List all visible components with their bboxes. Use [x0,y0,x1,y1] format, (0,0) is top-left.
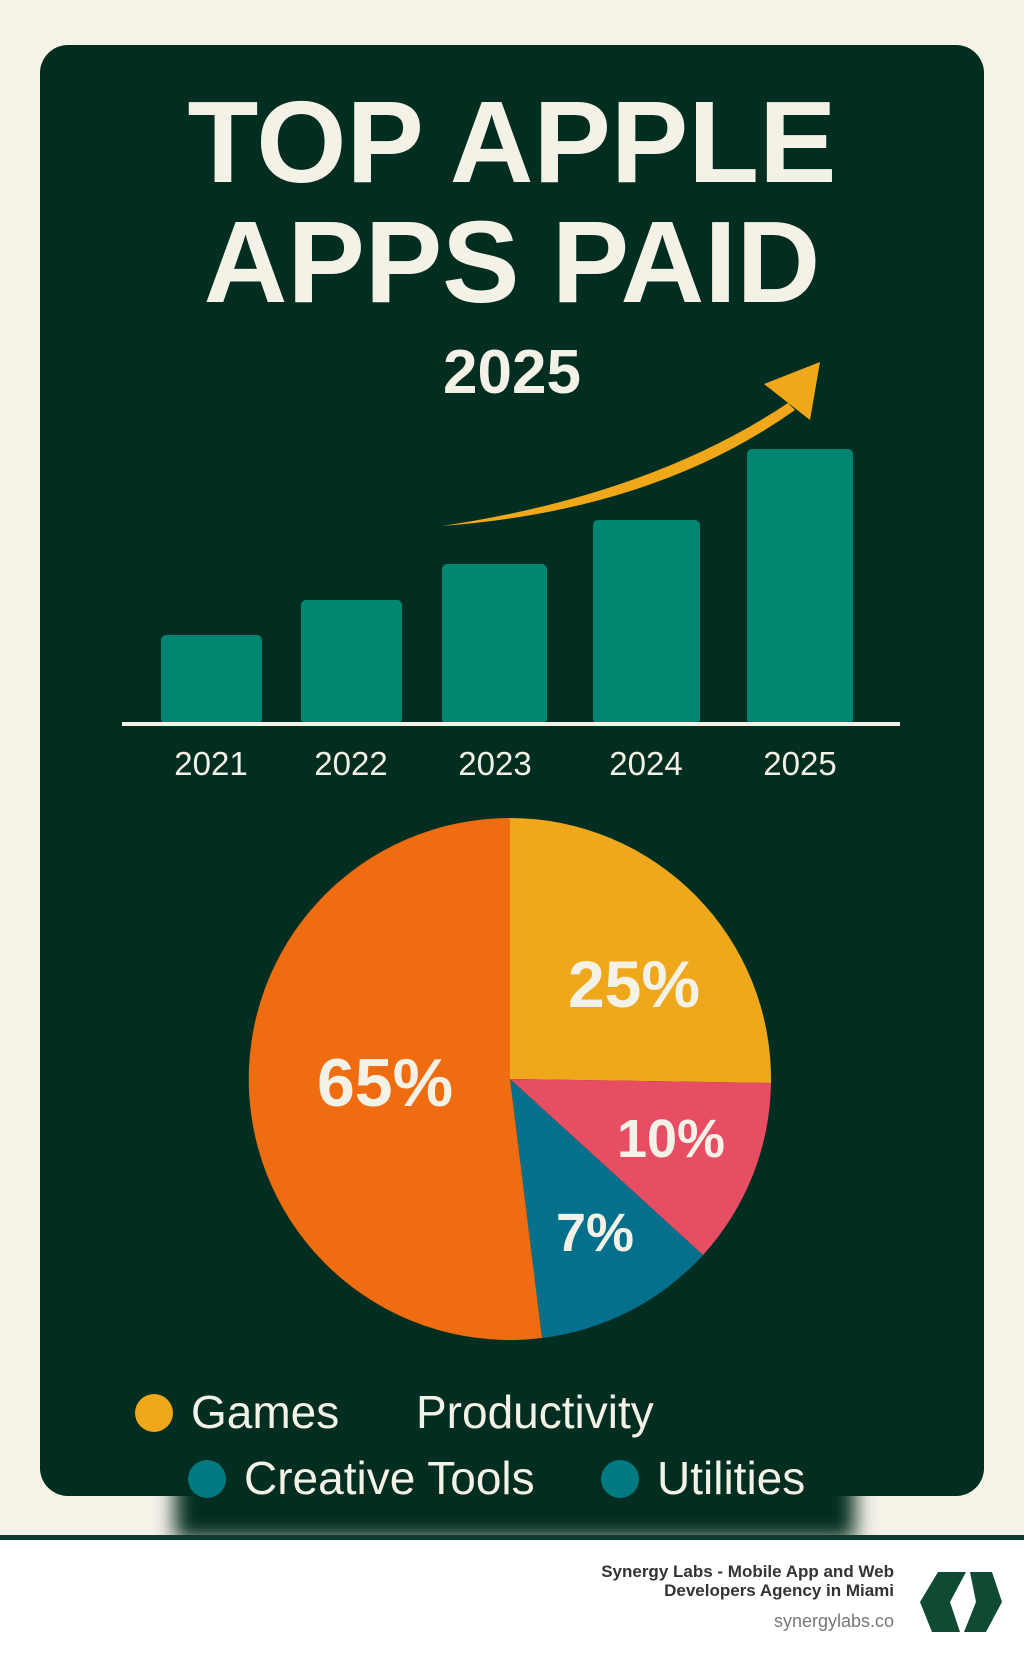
legend [135,1386,805,1504]
arrow: growth [442,362,820,526]
title [188,77,836,327]
logo [920,1572,1002,1632]
bar chart: 2021 [174,745,248,782]
pie chart: 65% [317,1045,453,1121]
title: TOP APPLE [188,77,836,207]
pie chart: 7% [556,1203,634,1263]
legend item: games: Games [191,1386,339,1438]
pie chart [248,818,772,1340]
legend item: creative tools: Creative Tools [244,1452,535,1504]
subtitle year: 2025 [443,338,581,407]
bar chart: 2022 [314,745,388,782]
footer text: Developers Agency in Miami [664,1581,894,1600]
footer [0,1535,1024,1671]
pie chart: 10% [617,1109,725,1169]
bar chart: 2023 [458,745,532,782]
legend item: utilities: Utilities [657,1452,805,1504]
footer text [601,1562,894,1631]
bar chart: 2025 [763,745,837,782]
footer text: Synergy Labs - Mobile App and Web [601,1562,894,1581]
shadow under panel [175,1470,855,1540]
bar chart: 2024 [609,745,683,782]
legend item: productivity: Productivity [416,1386,654,1438]
footer text: synergylabs.co [774,1611,894,1631]
pie chart: 25% [568,947,700,1021]
bar chart [122,449,900,782]
title: APPS PAID [204,197,820,327]
